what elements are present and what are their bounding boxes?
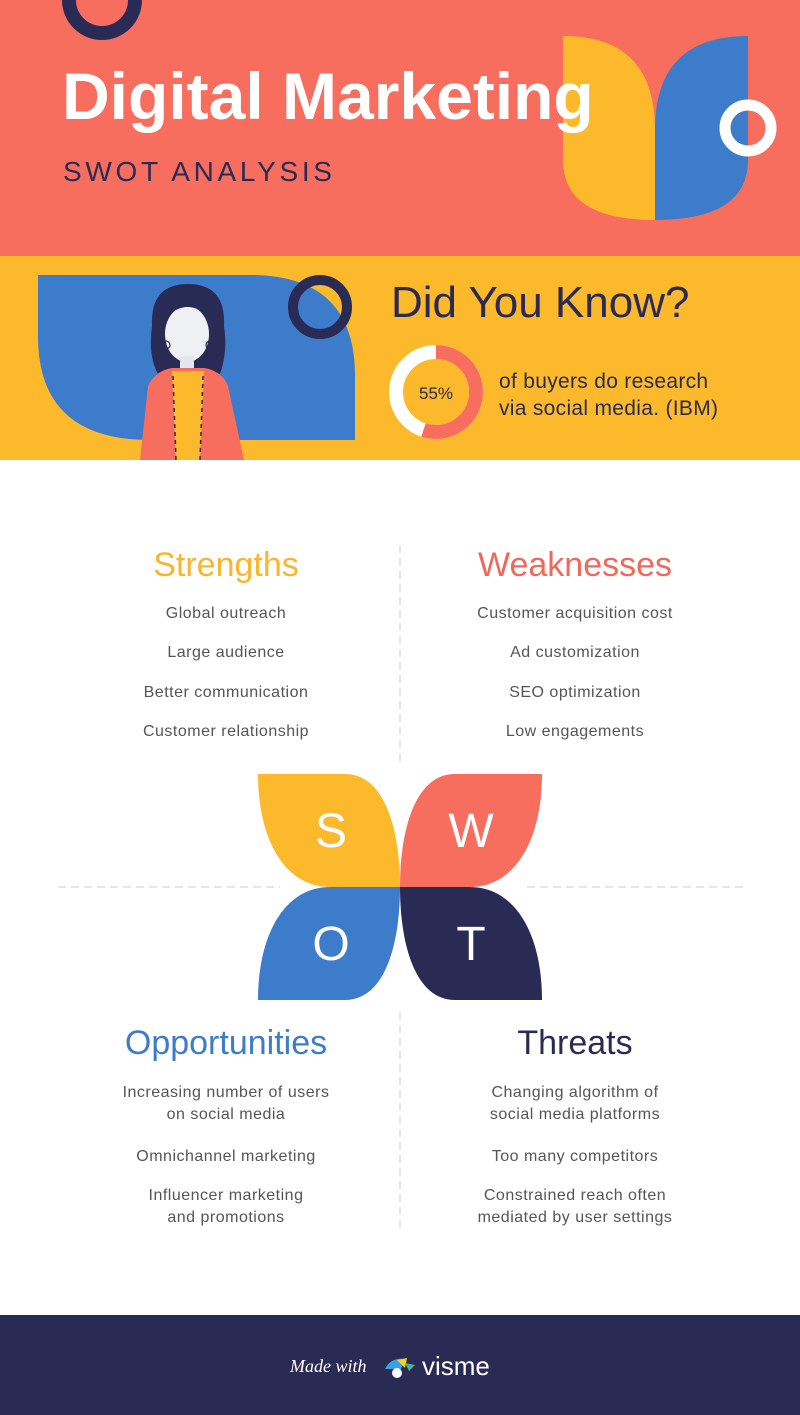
petal O: O xyxy=(312,918,350,971)
panel: weaknesses: Low engagements xyxy=(506,723,644,740)
petal W: W xyxy=(448,805,494,858)
petal T: T xyxy=(456,918,486,971)
panel: weaknesses: SEO optimization xyxy=(509,684,641,701)
heading: threats: Threats xyxy=(517,1024,633,1062)
panel: threats: Constrained reach often xyxy=(484,1187,666,1204)
panel: threats: Changing algorithm of xyxy=(491,1084,659,1101)
panel: strengths: Large audience xyxy=(167,644,285,661)
donut chart 55% xyxy=(389,345,483,439)
header band xyxy=(0,0,800,256)
panel: weaknesses xyxy=(477,546,673,740)
heading: strengths: Strengths xyxy=(153,546,299,584)
footer xyxy=(0,1315,800,1415)
subtitle: SWOT ANALYSIS xyxy=(63,156,336,187)
panel: opportunities: Omnichannel marketing xyxy=(136,1148,316,1165)
footer credit: Made with xyxy=(290,1356,366,1376)
stat text: via social media. (IBM) xyxy=(499,397,718,420)
panel: strengths: Customer relationship xyxy=(143,723,309,740)
footer credit xyxy=(290,1351,490,1381)
panel: strengths: Global outreach xyxy=(166,605,286,622)
panel: threats: social media platforms xyxy=(490,1106,660,1123)
panel: opportunities: and promotions xyxy=(167,1209,285,1226)
petal S xyxy=(258,774,400,887)
panel: threats: Too many competitors xyxy=(492,1148,658,1165)
header decorative shapes xyxy=(62,0,776,220)
footer credit: visme xyxy=(422,1351,490,1381)
panel: strengths xyxy=(143,546,309,740)
SWOT butterfly xyxy=(258,774,542,1000)
heading: did you know: Did You Know? xyxy=(391,278,689,327)
panel: threats xyxy=(478,1024,672,1226)
stat text xyxy=(499,370,718,420)
illustration: woman xyxy=(38,275,355,460)
did you know band xyxy=(0,256,800,460)
panel: threats: mediated by user settings xyxy=(478,1209,672,1226)
petal S: S xyxy=(315,805,347,858)
heading: opportunities: Opportunities xyxy=(125,1024,327,1062)
petal T xyxy=(400,887,542,1000)
title: Digital Marketing xyxy=(62,59,594,133)
petal O xyxy=(258,887,400,1000)
stat text: of buyers do research xyxy=(499,370,708,393)
panel: weaknesses: Ad customization xyxy=(510,644,640,661)
panel: strengths: Better communication xyxy=(144,684,308,701)
petal W xyxy=(400,774,542,887)
icon: visme logo xyxy=(385,1358,415,1378)
heading: weaknesses: Weaknesses xyxy=(478,546,672,584)
dashed dividers xyxy=(58,545,743,1228)
panel: opportunities: Influencer marketing xyxy=(149,1187,303,1204)
panel: opportunities xyxy=(123,1024,329,1226)
donut chart 55%: 55% xyxy=(419,384,453,403)
panel: weaknesses: Customer acquisition cost xyxy=(477,605,673,622)
panel: opportunities: on social media xyxy=(167,1106,285,1123)
panel: opportunities: Increasing number of users xyxy=(123,1084,329,1101)
